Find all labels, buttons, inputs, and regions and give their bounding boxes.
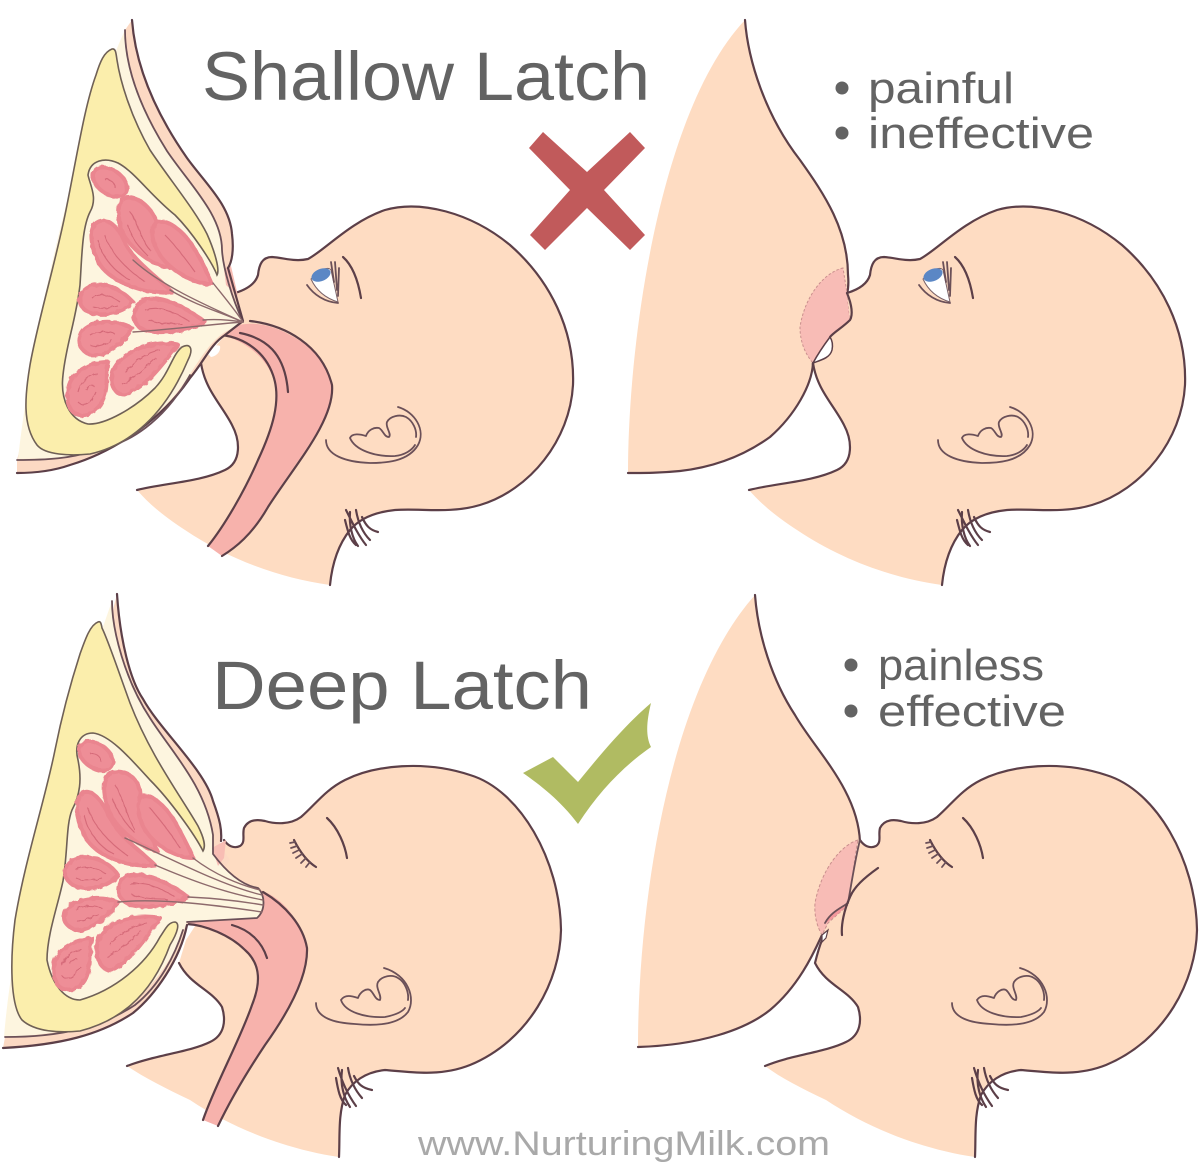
icon: green check mark	[523, 703, 651, 824]
hair, deep exterior	[972, 1068, 1008, 1107]
baby head, deep cross-section	[127, 766, 561, 1157]
eye, shallow exterior	[919, 257, 973, 303]
footer: website address: www.NurturingMilk.com	[417, 1125, 830, 1163]
ear, shallow cross-section	[326, 407, 421, 463]
areola, deep exterior	[815, 840, 858, 935]
breast, shallow exterior	[628, 20, 848, 473]
text block: deep latch effects: painless	[878, 641, 1044, 690]
hair, deep cross-section	[336, 1068, 372, 1107]
text block: shallow latch effects: painful	[868, 64, 1014, 113]
eye, deep exterior	[926, 818, 983, 867]
text block: shallow latch effects: ineffective	[868, 109, 1094, 158]
text block: deep latch effects: effective	[878, 687, 1066, 736]
breast anatomy, deep	[3, 594, 264, 1048]
ear, deep exterior	[952, 968, 1047, 1025]
baby head, deep exterior	[765, 766, 1197, 1157]
panel: deep latch cross-section	[3, 594, 561, 1157]
throat and tongue, shallow	[206, 321, 332, 556]
ear, shallow exterior	[938, 407, 1033, 463]
breast, deep exterior	[638, 595, 860, 1047]
panel: shallow latch cross-section	[17, 20, 573, 585]
milk lobes, deep	[54, 735, 193, 990]
eye, deep cross-section	[290, 818, 347, 867]
areola, shallow exterior	[800, 268, 850, 363]
milk ducts, shallow	[133, 260, 243, 332]
milk lobes, shallow	[67, 161, 212, 415]
hair, shallow exterior	[957, 510, 990, 546]
panel: deep latch exterior	[638, 595, 1197, 1157]
text block: deep latch effects	[844, 641, 1066, 736]
title: Shallow Latch: Shallow Latch	[202, 38, 650, 115]
icon: red X	[529, 132, 645, 250]
ear, deep cross-section	[316, 968, 411, 1025]
text block: shallow latch effects	[836, 64, 1094, 158]
baby head, shallow exterior	[749, 207, 1185, 585]
title: Deep Latch: Deep Latch	[212, 647, 592, 724]
panel: shallow latch exterior	[628, 20, 1185, 585]
baby head, shallow cross-section	[137, 207, 573, 585]
milk ducts, deep	[118, 838, 263, 912]
throat and tongue, deep	[185, 888, 307, 1126]
hair, shallow cross-section	[345, 510, 378, 546]
breast anatomy, shallow	[17, 20, 243, 473]
lips and cheek line, deep exterior	[822, 840, 878, 942]
eye, shallow cross-section	[307, 257, 361, 303]
